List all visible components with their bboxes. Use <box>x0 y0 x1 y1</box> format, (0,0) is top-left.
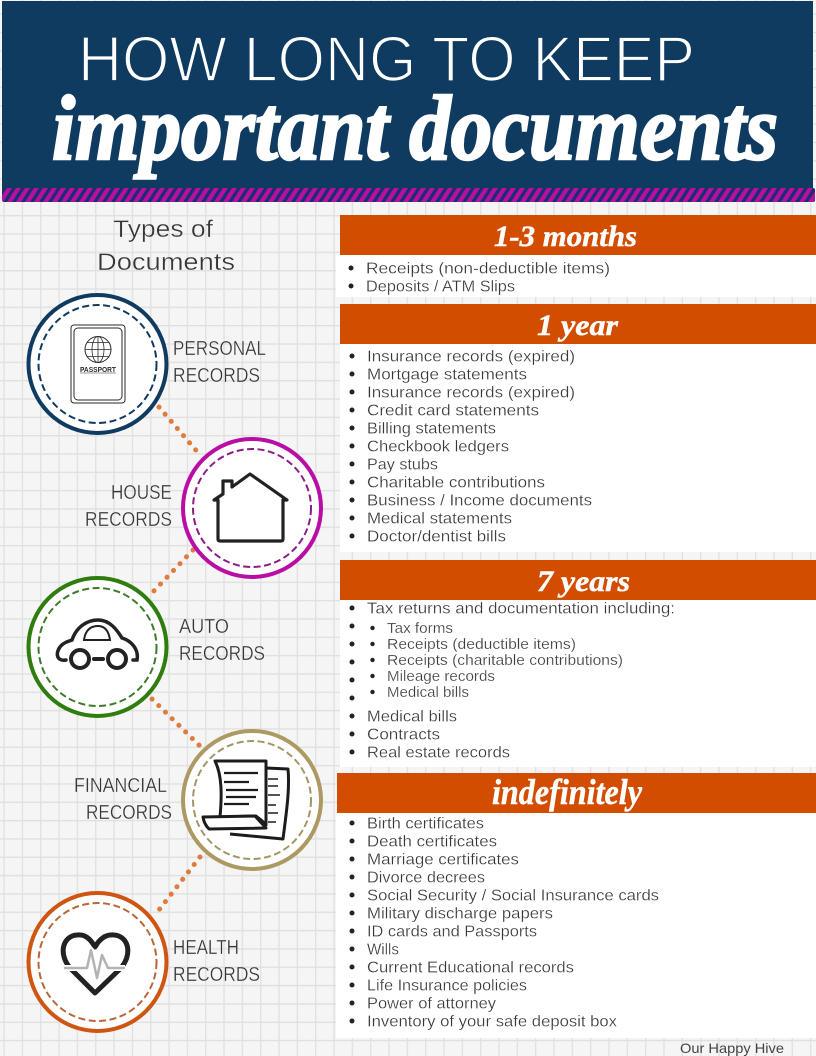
list: 7 years: Receipts (charitable contributions) <box>387 653 623 669</box>
title line one: HOW LONG TO KEEP <box>78 23 695 95</box>
list: indefinitely: Wills <box>367 942 399 958</box>
list: 1 year: Checkbook ledgers <box>367 438 509 456</box>
list: indefinitely: Inventory of your safe deposit box <box>367 1014 617 1030</box>
label: house records: HOUSE <box>111 482 172 504</box>
list: indefinitely: ID cards and Passports <box>367 924 537 940</box>
list: 1 year: Billing statements <box>367 420 496 438</box>
label: auto records: RECORDS <box>179 643 265 665</box>
list: 1 year: Doctor/dentist bills <box>367 528 506 546</box>
circle: auto records <box>28 578 166 716</box>
list: indefinitely: Divorce decrees <box>367 870 485 886</box>
icon: car <box>57 620 137 668</box>
heading text: 1 year: 1 year <box>537 309 618 342</box>
heading bar: 1 year <box>340 304 816 344</box>
label: auto records <box>179 616 265 665</box>
list: 7 years: Tax forms <box>387 621 453 637</box>
list: indefinitely: Life Insurance policies <box>367 978 527 994</box>
list: 7 years: Real estate records <box>367 744 510 762</box>
footer credit: Our Happy Hive <box>680 1040 784 1056</box>
list: indefinitely: Death certificates <box>367 834 497 850</box>
list: indefinitely: Power of attorney <box>367 996 496 1012</box>
label: personal records: PERSONAL <box>173 338 266 360</box>
list: 7 years: Mileage records <box>387 669 495 685</box>
list: 1 year: Pay stubs <box>367 456 438 474</box>
circle: health records <box>28 893 166 1031</box>
label: auto records: AUTO <box>179 616 229 638</box>
label: personal records <box>173 338 266 387</box>
list: 7 years: Contracts <box>367 726 440 744</box>
label: health records: RECORDS <box>173 964 260 986</box>
heading text: 1-3 months: 1-3 months <box>494 220 637 253</box>
panel: 1 year <box>340 304 816 552</box>
label: house records: RECORDS <box>85 509 172 531</box>
list: 1 year: Medical statements <box>367 510 512 528</box>
list: 7 years: Medical bills <box>387 685 469 701</box>
dotted connectors <box>150 407 201 915</box>
panel: indefinitely <box>336 772 816 1038</box>
heading text: indefinitely: indefinitely <box>492 772 643 812</box>
circle: house records <box>183 439 321 577</box>
label: house records <box>85 482 172 531</box>
heading text: 7 years: 7 years <box>537 565 630 598</box>
circle: financial records <box>183 731 321 869</box>
list: indefinitely: Marriage certificates <box>367 852 519 868</box>
list: 1 year: Insurance records (expired) <box>367 348 575 366</box>
list: 1-3 months <box>348 260 610 296</box>
list: 1 year: Insurance records (expired) <box>367 384 575 402</box>
list: indefinitely: Current Educational records <box>367 960 574 976</box>
list: 1 year: Business / Income documents <box>367 492 592 510</box>
list: 1 year: Credit card statements <box>367 402 539 420</box>
list: 1 year: Charitable contributions <box>367 474 545 492</box>
list: 7 years <box>350 600 675 762</box>
list: 1-3 months: Deposits / ATM Slips <box>366 278 515 296</box>
heading: types of documents: Documents <box>97 249 235 276</box>
icon: heart with pulse <box>63 935 128 993</box>
label: health records: HEALTH <box>173 937 239 959</box>
list: 1 year: Mortgage statements <box>367 366 527 384</box>
list: 7 years: Medical bills <box>367 708 457 726</box>
stripe band <box>2 188 815 202</box>
panel: 1-3 months <box>336 215 816 297</box>
list: indefinitely: Social Security / Social Insurance cards <box>367 888 659 904</box>
heading: types of documents <box>97 216 235 276</box>
list: 1 year <box>350 348 592 546</box>
icon: documents <box>203 761 289 839</box>
heading: types of documents: Types of <box>113 216 213 243</box>
heading bar: 7 years <box>340 560 816 600</box>
list: indefinitely: Military discharge papers <box>367 906 553 922</box>
label: financial records <box>74 775 172 824</box>
heading bar: indefinitely <box>337 773 816 813</box>
header banner <box>2 1 815 202</box>
list: indefinitely: Birth certificates <box>367 816 484 832</box>
circle: personal records <box>28 295 166 433</box>
label: financial records: RECORDS <box>86 802 172 824</box>
list: 1-3 months: Receipts (non-deductible items) <box>366 260 610 278</box>
label: personal records: RECORDS <box>173 365 260 387</box>
label: health records <box>173 937 260 986</box>
icon: house <box>214 474 287 541</box>
label: financial records: FINANCIAL <box>74 775 167 797</box>
heading bar: 1-3 months <box>340 215 816 255</box>
list: indefinitely <box>350 816 659 1030</box>
list: 7 years: Tax returns and documentation including: <box>367 600 675 618</box>
icon: passport: PASSPORT <box>80 367 117 374</box>
list: 7 years: Receipts (deductible items) <box>387 637 576 653</box>
panel: 7 years <box>340 560 816 767</box>
